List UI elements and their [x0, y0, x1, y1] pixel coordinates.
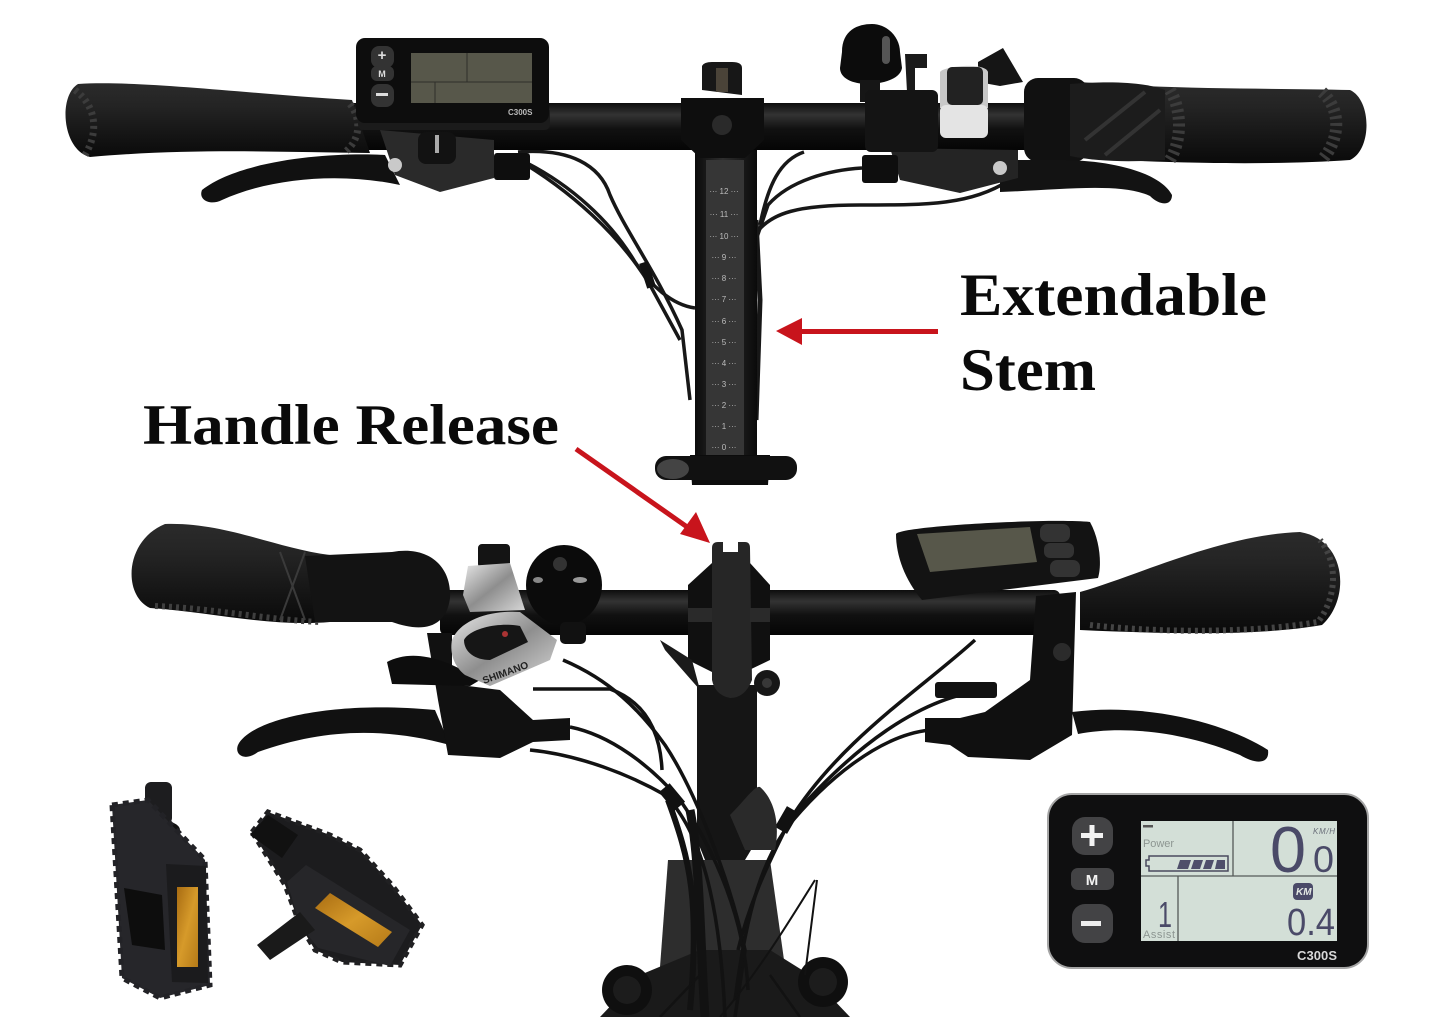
extendable stem: ··· 11 ···	[710, 210, 738, 219]
extendable stem: ··· 6 ···	[712, 317, 736, 326]
label: Extendable Stem: Extendable	[960, 262, 1267, 328]
top display: C300S	[508, 108, 533, 117]
label: Extendable Stem: Stem	[960, 337, 1096, 403]
LCD screen: 1	[1158, 894, 1172, 935]
cable clip	[639, 261, 656, 289]
extendable stem: ··· 8 ···	[712, 274, 736, 283]
model label: C300S	[1297, 948, 1337, 963]
top handlebar assembly	[66, 24, 1366, 485]
extendable stem: ··· 7 ···	[712, 295, 736, 304]
bottom silver shifter	[451, 544, 557, 687]
top left control bracket	[380, 130, 530, 192]
bottom right brake lever	[925, 592, 1268, 762]
LCD screen: 0	[1270, 813, 1306, 886]
LCD screen: Power	[1143, 838, 1174, 850]
LCD screen	[1141, 813, 1337, 944]
bottom base fork	[600, 860, 850, 1017]
bottom handlebar tube	[440, 590, 1060, 635]
LCD screen: KM/H	[1313, 827, 1335, 836]
extendable stem: ··· 0 ···	[712, 443, 736, 452]
extendable stem: ··· 4 ···	[712, 359, 736, 368]
LCD screen: 0	[1313, 839, 1334, 880]
top display: +	[378, 47, 387, 64]
extendable stem: ··· 12 ···	[709, 187, 739, 196]
bottom left grip	[132, 524, 330, 623]
arrow: to extendable stem	[776, 318, 938, 345]
bottom right grip	[1080, 532, 1340, 633]
bottom stem	[697, 685, 757, 860]
LCD screen: KM	[1296, 887, 1312, 898]
cable clips and stem lever	[659, 783, 799, 850]
control buttons: M	[1086, 872, 1098, 889]
extendable stem: ··· 5 ···	[712, 338, 736, 347]
bottom handlebar assembly	[132, 521, 1340, 1017]
extendable stem: ··· 2 ···	[712, 401, 736, 410]
top right brake lever	[1000, 160, 1172, 203]
label: Extendable Stem	[960, 262, 1267, 403]
bottom bell	[526, 545, 602, 644]
LCD display close-up	[1048, 794, 1368, 968]
top display: M	[378, 69, 386, 79]
top bell	[840, 24, 927, 102]
top display	[356, 38, 550, 130]
LCD screen: Assist	[1143, 929, 1175, 941]
extendable stem: ··· 1 ···	[712, 422, 736, 431]
extendable stem: ··· 3 ···	[712, 380, 736, 389]
top handlebar tube	[345, 103, 1065, 150]
bottom twist shifter	[305, 551, 450, 627]
top left grip	[66, 83, 370, 157]
folded pedal right	[250, 812, 422, 966]
top twist shifter	[1024, 78, 1165, 162]
top shifter	[865, 48, 1023, 152]
handle release clamp	[660, 542, 780, 698]
folded pedal left	[112, 782, 210, 998]
label: Handle Release: Handle Release	[143, 394, 559, 457]
extendable stem	[655, 62, 797, 485]
LCD screen: 0.4	[1287, 902, 1335, 944]
top right control bracket	[862, 148, 1018, 193]
bottom silver shifter: SHIMANO	[481, 660, 530, 687]
bottom cables	[530, 640, 990, 1017]
top cables	[515, 151, 1010, 420]
control buttons	[1071, 817, 1114, 943]
pedals	[112, 782, 422, 998]
bottom display	[896, 521, 1100, 600]
arrow: to handle release	[576, 449, 710, 543]
extendable stem: ··· 9 ···	[712, 253, 736, 262]
top left brake lever	[201, 154, 400, 202]
extendable stem: ··· 10 ···	[709, 232, 739, 241]
top right grip	[1080, 82, 1366, 163]
bottom left brake lever	[237, 633, 570, 758]
